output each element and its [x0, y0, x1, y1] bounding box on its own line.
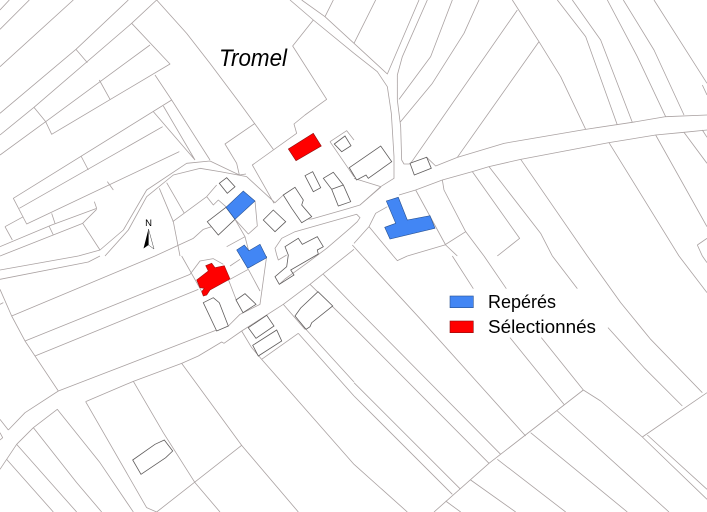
- legend: [450, 292, 596, 337]
- parcel boundaries: south-west quadrant: [0, 249, 354, 512]
- legend swatch: selected: [450, 321, 473, 333]
- parcel boundaries: south-east quadrant: [354, 256, 707, 512]
- legend label: spotted: Repérés: [488, 292, 556, 312]
- parcel boundaries: north-west quadrant: [0, 0, 354, 256]
- building: spotted, centre: [237, 244, 267, 268]
- building: selected, north: [288, 133, 321, 161]
- building: selected, church: [197, 263, 230, 296]
- north arrow: N: [145, 218, 152, 229]
- buildings: unselected: [133, 136, 431, 474]
- legend label: selected: Sélectionnés: [488, 317, 596, 337]
- building: spotted, north centre: [226, 191, 255, 219]
- parcel boundaries: north-east quadrant: [352, 0, 707, 256]
- road island and upper road edge: [275, 187, 381, 284]
- north arrow: [144, 218, 154, 249]
- place name: Tromel: [219, 45, 288, 72]
- legend swatch: spotted: [450, 296, 473, 308]
- building: spotted, T-shaped: [385, 197, 435, 239]
